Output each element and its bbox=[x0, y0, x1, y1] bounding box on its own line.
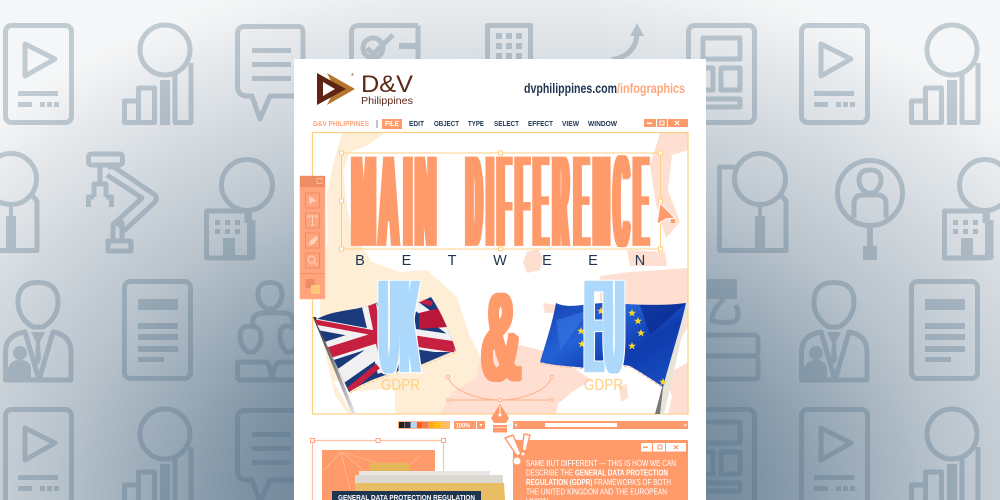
EU heading: EU bbox=[586, 249, 623, 405]
folder icon bbox=[353, 463, 505, 500]
icon: type tool bbox=[306, 213, 320, 228]
zoom level control bbox=[454, 421, 485, 430]
intro paragraph bbox=[526, 459, 676, 500]
flag pole bbox=[313, 317, 356, 414]
menu bar: VIEW bbox=[562, 121, 579, 128]
panel: folder image bbox=[310, 438, 505, 500]
icon: zoom tool bbox=[306, 253, 320, 268]
map: Ireland in pale pink bbox=[523, 249, 557, 313]
map: Scandinavia in pale pink bbox=[627, 132, 688, 266]
title: Main Difference bbox=[352, 124, 648, 280]
map: central Europe in pale pink bbox=[600, 268, 688, 360]
colour palette bbox=[398, 421, 450, 429]
website url: /infographics bbox=[617, 81, 685, 96]
icon: pen tool bbox=[306, 233, 320, 248]
panel: hero map artboard bbox=[312, 132, 688, 414]
panel: tool palette bbox=[300, 176, 325, 299]
folder label bbox=[332, 491, 481, 500]
intro paragraph: THE UNITED KINGDOM AND THE EUROPEAN bbox=[526, 488, 667, 496]
scroll bar bbox=[513, 421, 688, 429]
selection box around title bbox=[340, 151, 662, 251]
menu bar: WINDOW bbox=[588, 121, 617, 128]
icon: arrow tool bbox=[306, 193, 320, 208]
menu bar: EFFECT bbox=[528, 121, 554, 128]
menu bar: TYPE bbox=[468, 121, 484, 128]
menu bar: SELECT bbox=[494, 121, 520, 128]
subtitle: Between: BETWEEN bbox=[355, 253, 645, 269]
menu bar: EDIT bbox=[409, 121, 425, 128]
icon: D&V Philippines logo: Philippines bbox=[361, 95, 413, 107]
icon: exclamation marks bbox=[505, 434, 530, 465]
menu bar: D&V PHILIPPINES bbox=[313, 121, 369, 128]
UK GDPR label: GDPR bbox=[381, 377, 420, 394]
EU GDPR label: GDPR bbox=[584, 377, 623, 394]
menu bar: OBJECT bbox=[434, 121, 460, 128]
intro paragraph: REGULATION (GDPR) FRAMEWORKS OF BOTH bbox=[526, 478, 671, 487]
icon: D&V Philippines logo: ® bbox=[351, 72, 354, 77]
UK heading: UK bbox=[380, 249, 419, 405]
icon: colour swatches bbox=[306, 279, 320, 294]
title: Main Difference: DIFFERENCE bbox=[467, 124, 648, 280]
website url: dvphilippines.com bbox=[524, 81, 617, 96]
map: Great Britain in pale yellow bbox=[320, 133, 481, 414]
menu bar bbox=[313, 119, 617, 129]
white infographic page bbox=[294, 59, 706, 500]
icon: D&V Philippines logo: D&V bbox=[361, 71, 413, 98]
icon: D&V Philippines logo bbox=[317, 71, 413, 107]
text: & bbox=[481, 269, 521, 407]
icon: pen nib bbox=[491, 404, 509, 432]
zoom level control: 100% bbox=[456, 422, 470, 430]
icon: cursor arrow bbox=[657, 203, 675, 224]
EU flag bbox=[535, 298, 690, 414]
window controls bbox=[641, 443, 686, 452]
pen tool curve bbox=[446, 376, 554, 402]
artboard frame bbox=[312, 132, 688, 414]
flag pole bbox=[655, 303, 689, 414]
window controls bbox=[644, 119, 688, 127]
intro paragraph: SAME BUT DIFFERENT — THIS IS HOW WE CAN bbox=[526, 459, 676, 468]
UK flag bbox=[313, 297, 456, 414]
menu bar: FILE bbox=[385, 121, 399, 128]
map: Italy in pale pink bbox=[619, 362, 688, 414]
callout panel: intro text bbox=[513, 440, 688, 500]
intro paragraph: DESCRIBE THE GENERAL DATA PROTECTION bbox=[526, 468, 668, 478]
map: western Europe in pale pink bbox=[440, 345, 592, 414]
title: Main Difference: MAIN bbox=[352, 125, 436, 280]
